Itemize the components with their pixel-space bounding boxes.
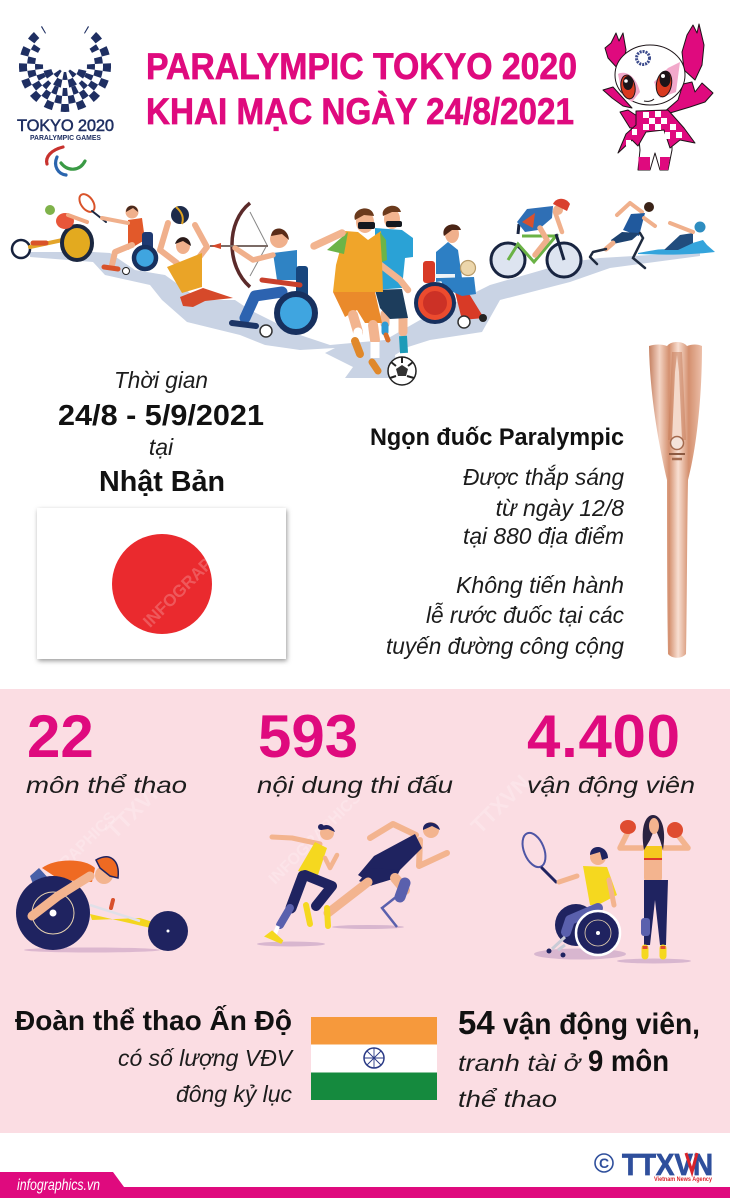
athlete: swimmer	[638, 222, 715, 255]
text block: time and place: Nhật Bản	[99, 466, 225, 498]
panel: statistics	[0, 689, 730, 1133]
title: KHAI MẠC NGÀY 24/8/2021	[146, 91, 574, 132]
text block: time and place: tại	[149, 434, 174, 460]
text block: India athletes: 54	[458, 1004, 495, 1041]
icon: football	[388, 357, 416, 385]
illustration: wheelchair racer	[16, 857, 188, 952]
watermark: INFOGRAPHICS	[266, 789, 365, 888]
mouth	[644, 99, 654, 101]
text block: India delegation: đông kỷ lục	[176, 1081, 292, 1107]
flag: India	[311, 1017, 437, 1100]
stat: 4400 athletes: vận động viên	[527, 772, 695, 798]
stat: 22 sports	[26, 703, 187, 798]
text block: India delegation: Đoàn thể thao Ấn Độ	[15, 1005, 292, 1036]
illustration: tennis player and boxer	[518, 815, 691, 964]
logo: TTXVN	[595, 1147, 713, 1183]
athlete: sitting volleyball	[160, 206, 233, 307]
illustration: sprinters	[257, 822, 447, 946]
athlete: wheelchair archer	[210, 203, 315, 337]
left wing	[603, 87, 632, 108]
text block: time and place: 24/8 - 5/9/2021	[58, 400, 264, 432]
stat: 22 sports: 22	[27, 703, 94, 770]
forehead emblem	[636, 52, 650, 64]
text block: Paralympic torch: tuyến đường công cộng	[386, 633, 624, 659]
text block: Paralympic torch: Được thắp sáng	[463, 464, 624, 490]
athlete: cyclist	[491, 199, 581, 277]
athlete: racing wheelchair	[12, 191, 106, 260]
watermark: INFOGRAPHICS	[21, 809, 120, 908]
ground shadow	[30, 252, 700, 378]
eyes	[619, 74, 637, 100]
text block: India delegation: có số lượng VĐV	[118, 1045, 295, 1071]
flag: Japan	[37, 508, 287, 661]
stat: 593 events: nội dung thi đấu	[257, 772, 453, 798]
stat: 4400 athletes	[527, 703, 695, 798]
scarf	[618, 110, 695, 153]
logo: TTXVN: Vietnam News Agency	[654, 1176, 712, 1183]
text block: India delegation	[15, 1005, 295, 1107]
watermark: TTXVN	[101, 775, 170, 844]
text: Paralympic Games: PARALYMPIC GAMES	[30, 133, 101, 142]
logo: Tokyo 2020 Paralympic Games	[17, 30, 114, 175]
text block: India athletes: vận động viên,	[503, 1008, 700, 1041]
right wing and arm	[663, 82, 713, 113]
text block: Paralympic torch: Ngọn đuốc Paralympic	[370, 424, 624, 451]
text block: Paralympic torch: tại 880 địa điểm	[463, 523, 624, 549]
text block: time and place: Thời gian	[114, 367, 208, 393]
text block: India athletes	[458, 1004, 700, 1112]
icon: agitos	[47, 147, 85, 175]
icon: torch	[649, 342, 702, 658]
head	[615, 45, 685, 105]
text block: India athletes: 9 môn	[588, 1045, 669, 1078]
illustration: parasport athletes band	[12, 191, 715, 385]
athlete: red wheelchair	[416, 224, 487, 328]
flag: Japan: INFOGRAPHICS	[139, 526, 245, 631]
athlete: prosthetic runner	[590, 202, 655, 268]
body and legs	[637, 118, 672, 170]
text block: Paralympic torch: lễ rước đuốc tại các	[426, 601, 624, 628]
text block: Paralympic torch: từ ngày 12/8	[496, 495, 624, 521]
athletes: blind football players	[314, 206, 413, 371]
text block: Paralympic torch: Không tiến hành	[456, 572, 624, 598]
left arm	[620, 110, 640, 128]
footer: publisher bar	[0, 1172, 730, 1198]
text: website: infographics.vn	[17, 1177, 100, 1194]
ears	[605, 33, 626, 70]
stat: 22 sports: môn thể thao	[26, 772, 187, 798]
text block: India athletes: thể thao	[458, 1086, 557, 1112]
text block: Paralympic torch	[370, 424, 624, 659]
text: TOKYO 2020: TOKYO 2020	[17, 117, 114, 135]
logo: TTXVN: TTXVN	[622, 1147, 713, 1182]
mascot: Someity	[603, 24, 713, 170]
stat: 593 events: 593	[258, 703, 358, 770]
title: PARALYMPIC TOKYO 2020	[146, 46, 577, 87]
athlete: wheelchair tennis	[102, 206, 156, 274]
icon: chequered wreath	[23, 30, 107, 108]
watermark	[21, 770, 535, 908]
watermark: TTXVN	[466, 770, 535, 839]
title	[146, 46, 577, 132]
stat: 4400 athletes: 4.400	[527, 703, 680, 770]
text block: India athletes: tranh tài ở	[458, 1050, 582, 1076]
logo: TTXVN: C	[599, 1155, 609, 1171]
text block: time and place	[58, 367, 264, 498]
stat: 593 events	[257, 703, 453, 798]
